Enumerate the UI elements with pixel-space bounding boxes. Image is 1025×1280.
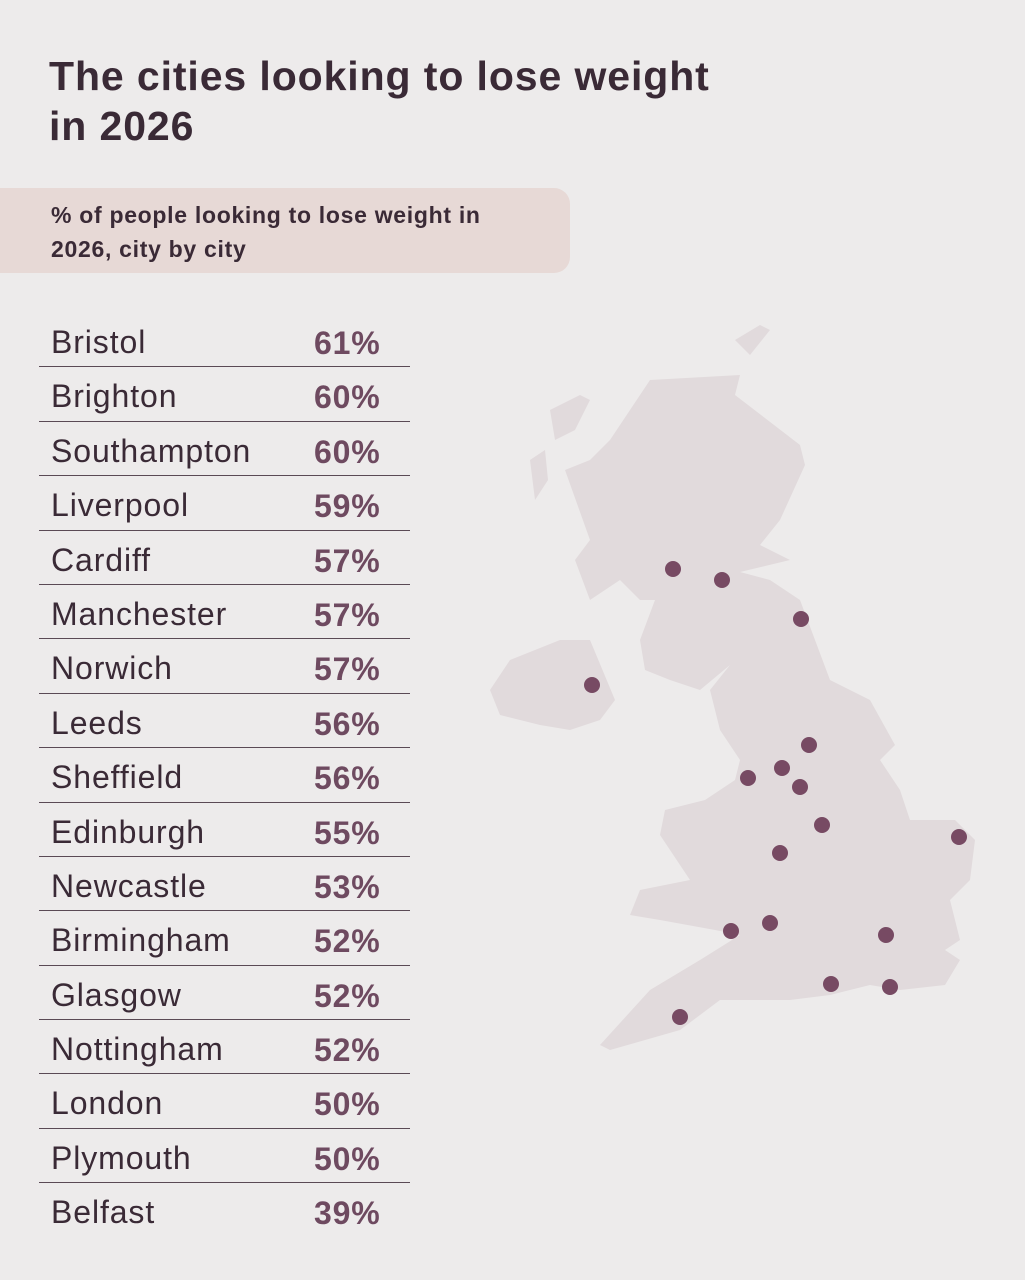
table: city percentages: 53% [314, 869, 380, 905]
table: city percentages: Sheffield [51, 759, 183, 795]
table: city percentages: 59% [314, 488, 380, 524]
table: city percentages: 52% [314, 1032, 380, 1068]
table: city percentages: Manchester [51, 596, 227, 632]
table: city percentages: Glasgow [51, 977, 182, 1013]
table: city percentages: 52% [314, 923, 380, 959]
table: city percentages: 50% [314, 1141, 380, 1177]
table: city percentages: 55% [314, 815, 380, 851]
table: city percentages: Belfast [51, 1194, 155, 1230]
table: city percentages: London [51, 1085, 163, 1121]
table: city percentages: 50% [314, 1086, 380, 1122]
subtitle pill: % of people looking to lose weight in [51, 202, 481, 228]
subtitle pill: 2026, city by city [51, 236, 246, 262]
title: in 2026 [49, 103, 194, 149]
table: city percentages: Nottingham [51, 1031, 224, 1067]
subtitle pill [0, 188, 570, 273]
table: city percentages: Liverpool [51, 487, 189, 523]
table: city percentages: 61% [314, 325, 380, 361]
table: city percentages: Birmingham [51, 922, 231, 958]
table: city percentages: Bristol [51, 324, 146, 360]
table: city percentages: Newcastle [51, 868, 207, 904]
table: city percentages: Norwich [51, 650, 173, 686]
title: The cities looking to lose weight [49, 53, 710, 99]
table: city percentages: Cardiff [51, 542, 151, 578]
table: city percentages: 57% [314, 651, 380, 687]
table: city percentages: 52% [314, 978, 380, 1014]
table: city percentages: 57% [314, 543, 380, 579]
table: city percentages: 56% [314, 706, 380, 742]
table: city percentages: 56% [314, 760, 380, 796]
title [49, 53, 710, 149]
table: city percentages: Leeds [51, 705, 143, 741]
table: city percentages: Southampton [51, 433, 251, 469]
table: city percentages [39, 324, 410, 1231]
table: city percentages: Plymouth [51, 1140, 192, 1176]
table: city percentages: Edinburgh [51, 814, 205, 850]
table: city percentages: Brighton [51, 378, 177, 414]
table: city percentages: 60% [314, 434, 380, 470]
table: city percentages: 57% [314, 597, 380, 633]
table: city percentages: 60% [314, 379, 380, 415]
table: city percentages: 39% [314, 1195, 380, 1231]
